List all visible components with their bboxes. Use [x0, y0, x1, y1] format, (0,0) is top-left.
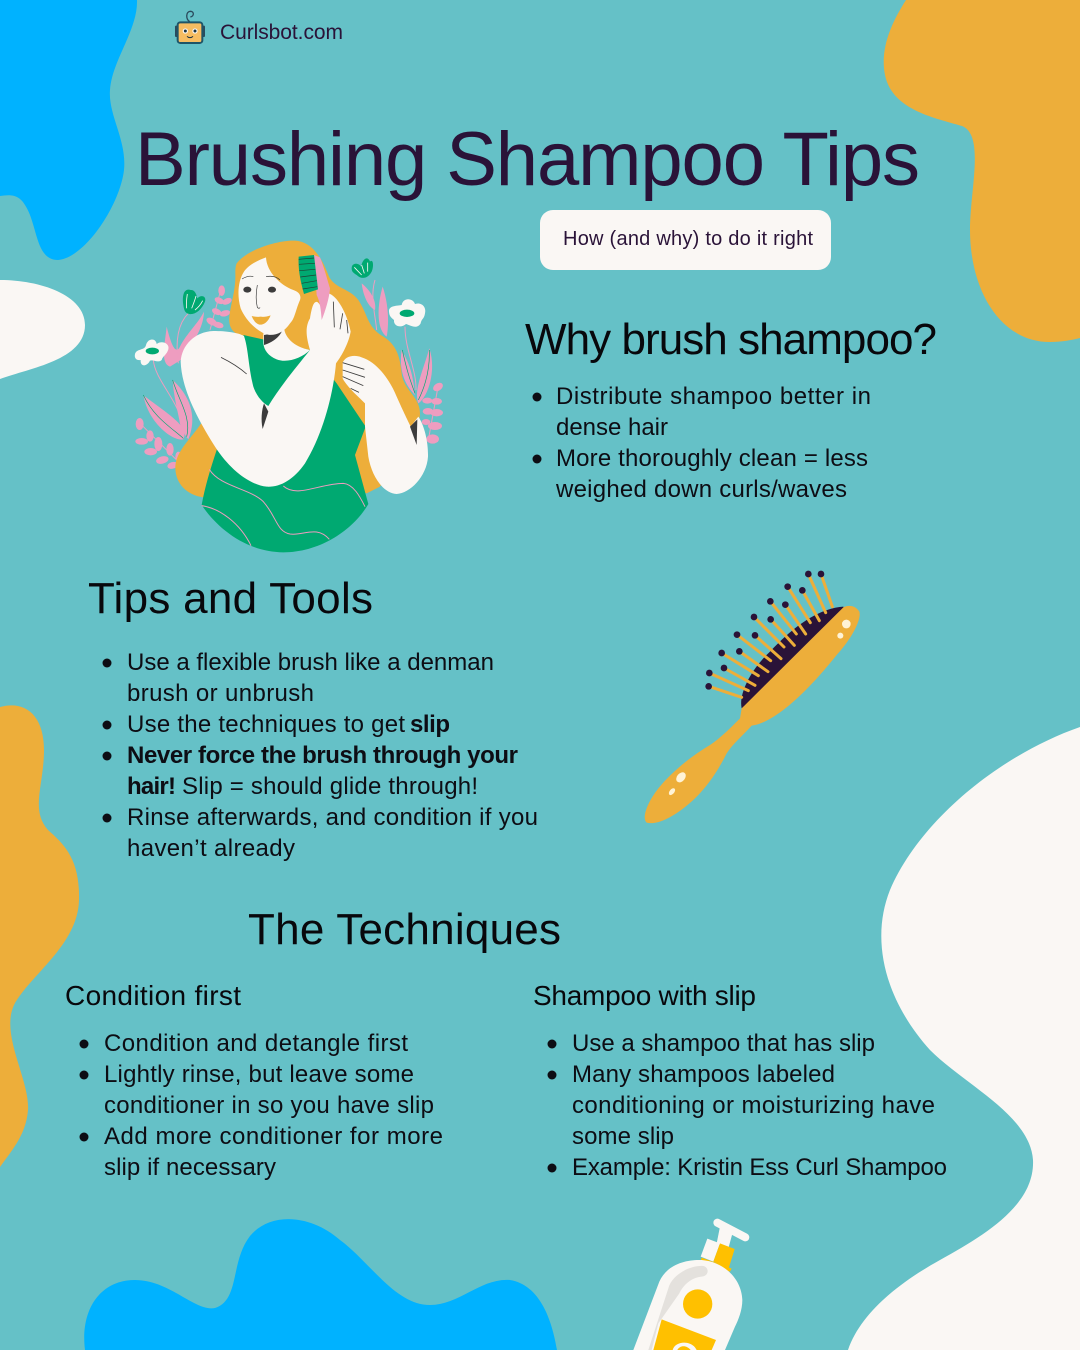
dot: [683, 1289, 712, 1319]
face: [238, 257, 300, 335]
dress: [202, 335, 368, 552]
illustration: shampoo bottle: [633, 1223, 745, 1350]
hair: [175, 241, 420, 497]
arm creases: [221, 302, 348, 374]
list: why brush shampoo: Distribute shampoo better in: [556, 383, 871, 410]
blob: orange top right: [884, 0, 1080, 342]
text: site name: Curlsbot.com: [220, 21, 343, 44]
blob: orange left: [0, 705, 79, 1167]
bristle tips: [705, 571, 824, 690]
facial features: [242, 276, 280, 325]
highlights: [668, 620, 851, 796]
list: tips and tools: Use the techniques to get: [127, 711, 405, 738]
list: tips and tools: haven’t already: [127, 835, 295, 862]
list: tips and tools: Use a flexible brush like a denman: [127, 649, 494, 676]
list: shampoo with slip: Use a shampoo that has slip: [572, 1030, 875, 1057]
list: condition first: [80, 1030, 443, 1181]
lower arm and hand: [343, 356, 428, 494]
heading: the techniques: The Techniques: [248, 905, 561, 954]
raised arm: [181, 293, 351, 487]
list: why brush shampoo: [532, 383, 871, 503]
hair lock: [337, 353, 368, 408]
list: condition first: conditioner in so you have slip: [104, 1092, 434, 1119]
neck: [263, 325, 310, 361]
list: why brush shampoo: weighed down curls/waves: [555, 476, 847, 503]
list: tips and tools: Rinse afterwards, and condition if you: [127, 804, 538, 831]
pump: [701, 1223, 745, 1272]
list: shampoo with slip: some slip: [572, 1123, 674, 1150]
blob: white right: [848, 727, 1080, 1350]
hair brush in hand: [299, 255, 330, 320]
list: condition first: Add more conditioner for more: [104, 1123, 443, 1150]
bristle pad: [741, 607, 847, 708]
finger and elbow lines: [343, 363, 365, 392]
list: why brush shampoo: More thoroughly clean = less: [556, 445, 868, 472]
subheading: condition first: Condition first: [65, 980, 241, 1011]
subtitle pill: How (and why) to do it right: [563, 228, 813, 250]
list: shampoo with slip: Many shampoos labeled: [572, 1061, 835, 1088]
blob: white left: [0, 280, 85, 379]
list: condition first: Lightly rinse, but leave some: [104, 1061, 414, 1088]
bottle body: [633, 1260, 742, 1350]
list: tips and tools: Slip = should glide through!: [182, 773, 478, 800]
bristles: [709, 574, 832, 697]
subheading: shampoo with slip: Shampoo with slip: [533, 980, 756, 1011]
heading: why brush shampoo: Why brush shampoo?: [525, 315, 937, 364]
list: tips and tools: hair!: [127, 773, 176, 800]
list: shampoo with slip: conditioning or moisturizing have: [572, 1092, 935, 1119]
blob: blue bottom: [84, 1219, 557, 1350]
icon: robot head: [175, 11, 205, 43]
list: condition first: slip if necessary: [104, 1154, 276, 1181]
list: tips and tools: Never force the brush through your: [127, 742, 518, 769]
plants: [135, 258, 444, 470]
logo: Curlsbot: [175, 11, 343, 44]
dress pattern: [202, 469, 365, 546]
list: tips and tools: brush or unbrush: [127, 680, 314, 707]
title: Brushing Shampoo Tips: [135, 117, 920, 202]
list: condition first: Condition and detangle first: [104, 1030, 408, 1057]
list: tips and tools: [102, 649, 538, 862]
list: tips and tools: slip: [410, 711, 450, 738]
illustration: hair brush: [645, 571, 860, 823]
label: [653, 1319, 716, 1350]
list: why brush shampoo: dense hair: [556, 414, 668, 441]
brush body: [645, 606, 860, 823]
list: shampoo with slip: [548, 1030, 947, 1181]
list: shampoo with slip: Example: Kristin Ess Curl Shampoo: [572, 1154, 947, 1181]
subtitle pill: [540, 210, 831, 270]
illustration: woman brushing hair: [135, 241, 444, 552]
blob: blue top left: [0, 0, 137, 260]
heading: tips and tools: Tips and Tools: [88, 574, 373, 623]
